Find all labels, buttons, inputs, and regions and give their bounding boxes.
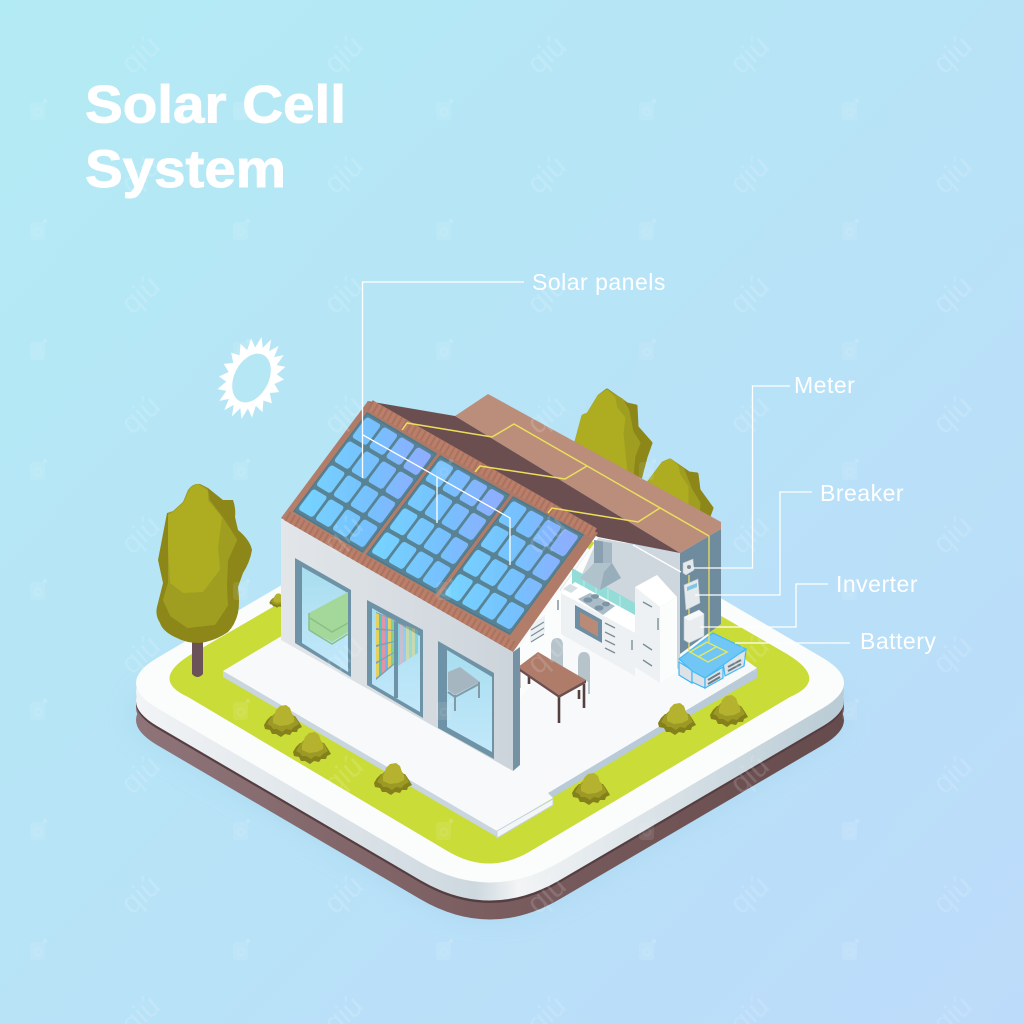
lawn	[169, 494, 809, 864]
watermark pattern: qiú	[318, 749, 370, 801]
drawer handles	[558, 600, 632, 653]
slab left side	[223, 671, 497, 837]
watermark pattern: qiú	[318, 629, 370, 681]
watermark pattern: qiú	[927, 629, 979, 681]
sofa	[309, 592, 348, 644]
front step	[497, 799, 553, 838]
ridge tiles	[370, 405, 594, 533]
solar panel three	[440, 497, 583, 634]
watermark pattern: qiú	[115, 29, 167, 81]
chair two	[578, 652, 590, 694]
watermark pattern: qiú	[521, 389, 573, 441]
interior back wall	[560, 538, 680, 670]
watermark pattern: qiú	[521, 629, 573, 681]
fridge	[635, 575, 677, 683]
watermark pattern: qiú	[318, 149, 370, 201]
watermark pattern: qiú	[318, 869, 370, 921]
watermark pattern: qiú	[927, 869, 979, 921]
inverter leader	[700, 584, 828, 627]
watermark pattern: qiú	[115, 149, 167, 201]
roof dark slope	[367, 401, 680, 553]
title line one: Solar Cell	[85, 76, 346, 134]
watermark pattern: qiú	[318, 509, 370, 561]
tree back two	[648, 460, 712, 522]
sliding door mullion	[394, 622, 398, 698]
wall shelf	[530, 615, 545, 642]
slab right side	[548, 668, 757, 800]
yellow wall cable	[689, 536, 709, 652]
watermark pattern: qiú	[115, 749, 167, 801]
front roof	[281, 401, 598, 652]
battery top surface	[679, 633, 746, 678]
watermark pattern: qiú	[724, 629, 776, 681]
white platform side	[136, 492, 844, 900]
title	[85, 76, 346, 199]
label: inverter: Inverter	[836, 571, 918, 597]
meter leader	[633, 386, 790, 572]
label: breaker: Breaker	[820, 480, 904, 506]
watermark pattern: qiú	[318, 269, 370, 321]
watermark pattern: qiú	[115, 509, 167, 561]
watermark pattern: qiú	[521, 29, 573, 81]
platform shadow	[136, 690, 844, 914]
watermark pattern: qiú	[927, 149, 979, 201]
watermark pattern: qiú	[115, 869, 167, 921]
trunk	[192, 632, 203, 677]
bush left one	[264, 705, 302, 737]
backsplash tiles	[572, 568, 635, 618]
small bush behind house	[269, 593, 287, 608]
battery left	[679, 662, 692, 683]
foliage shadow	[156, 484, 252, 643]
bush right one	[658, 703, 696, 735]
oven	[575, 605, 602, 643]
dining chairs	[551, 638, 590, 694]
leader lines	[362, 282, 850, 643]
solar panel two	[367, 456, 509, 593]
watermark pattern: qiú	[521, 869, 573, 921]
chair one	[551, 638, 563, 668]
window with sofa	[295, 558, 351, 677]
label: meter: Meter	[794, 372, 855, 398]
left tree	[156, 484, 252, 677]
watermark pattern: qiú	[318, 389, 370, 441]
watermark pattern: qiú	[724, 29, 776, 81]
window with table	[438, 641, 494, 759]
bush middle	[374, 763, 412, 795]
tree back one	[576, 390, 651, 480]
bush right two	[710, 695, 748, 727]
watermark pattern: qiú	[318, 29, 370, 81]
watermark pattern: qiú	[724, 749, 776, 801]
watermark pattern: qiú	[724, 869, 776, 921]
counter front	[561, 593, 635, 676]
sun icon	[204, 325, 299, 431]
watermark pattern: qiú	[724, 389, 776, 441]
watermark pattern: qiú	[724, 269, 776, 321]
watermark pattern: qiú	[927, 269, 979, 321]
meter box	[683, 559, 694, 575]
soil top shadow line	[136, 504, 844, 903]
concrete slab	[223, 500, 757, 838]
counter top	[561, 582, 635, 633]
platform base	[136, 484, 844, 920]
watermark pattern: qiú	[521, 749, 573, 801]
kitchen	[530, 540, 677, 683]
cutaway side wall	[680, 529, 721, 654]
watermark pattern: qiú	[521, 149, 573, 201]
watermark pattern: qiú	[521, 509, 573, 561]
white platform top	[136, 484, 844, 882]
foliage mid	[165, 486, 235, 626]
watermark pattern: qiú	[927, 509, 979, 561]
side table	[448, 667, 480, 711]
batteries	[679, 633, 746, 688]
watermark pattern: qiú	[521, 269, 573, 321]
label: battery: Battery	[860, 628, 936, 654]
slab top	[223, 500, 757, 831]
watermark pattern: qiú	[115, 269, 167, 321]
breaker box	[684, 579, 700, 610]
solar panels leader	[362, 282, 524, 565]
eave tiles	[287, 516, 513, 646]
roof light slope	[455, 394, 721, 553]
label: solar panels: Solar panels	[532, 269, 666, 295]
back trees	[576, 390, 712, 522]
soil layer	[136, 508, 844, 920]
title line two: System	[85, 140, 286, 199]
watermark pattern: qiú	[115, 629, 167, 681]
bushes	[264, 695, 748, 805]
sink	[563, 584, 578, 593]
yellow roof cables	[402, 423, 709, 536]
bookshelf	[376, 612, 418, 680]
breaker leader	[695, 492, 812, 595]
watermark pattern: qiú	[724, 149, 776, 201]
battery leader	[735, 642, 850, 644]
front wall	[281, 518, 520, 771]
interior left white wall	[519, 538, 598, 700]
cooktop	[578, 593, 615, 615]
watermark pattern: qiú	[927, 29, 979, 81]
foliage highlight	[170, 486, 220, 591]
watermark pattern: qiú	[927, 389, 979, 441]
window with bookshelf	[367, 600, 423, 718]
battery middle	[692, 667, 723, 688]
cooker hood	[580, 540, 621, 590]
roof back	[367, 394, 721, 553]
dining table	[518, 652, 586, 723]
bush left two	[293, 732, 331, 764]
watermark pattern: qiú	[724, 509, 776, 561]
watermark pattern: qiú	[115, 389, 167, 441]
watermark pattern: qiú	[927, 749, 979, 801]
battery wiring	[690, 642, 727, 662]
battery right	[723, 650, 746, 676]
inverter box	[684, 610, 704, 643]
solar panel one	[294, 413, 436, 552]
wall corner edge	[513, 647, 520, 771]
bush front	[572, 773, 610, 805]
